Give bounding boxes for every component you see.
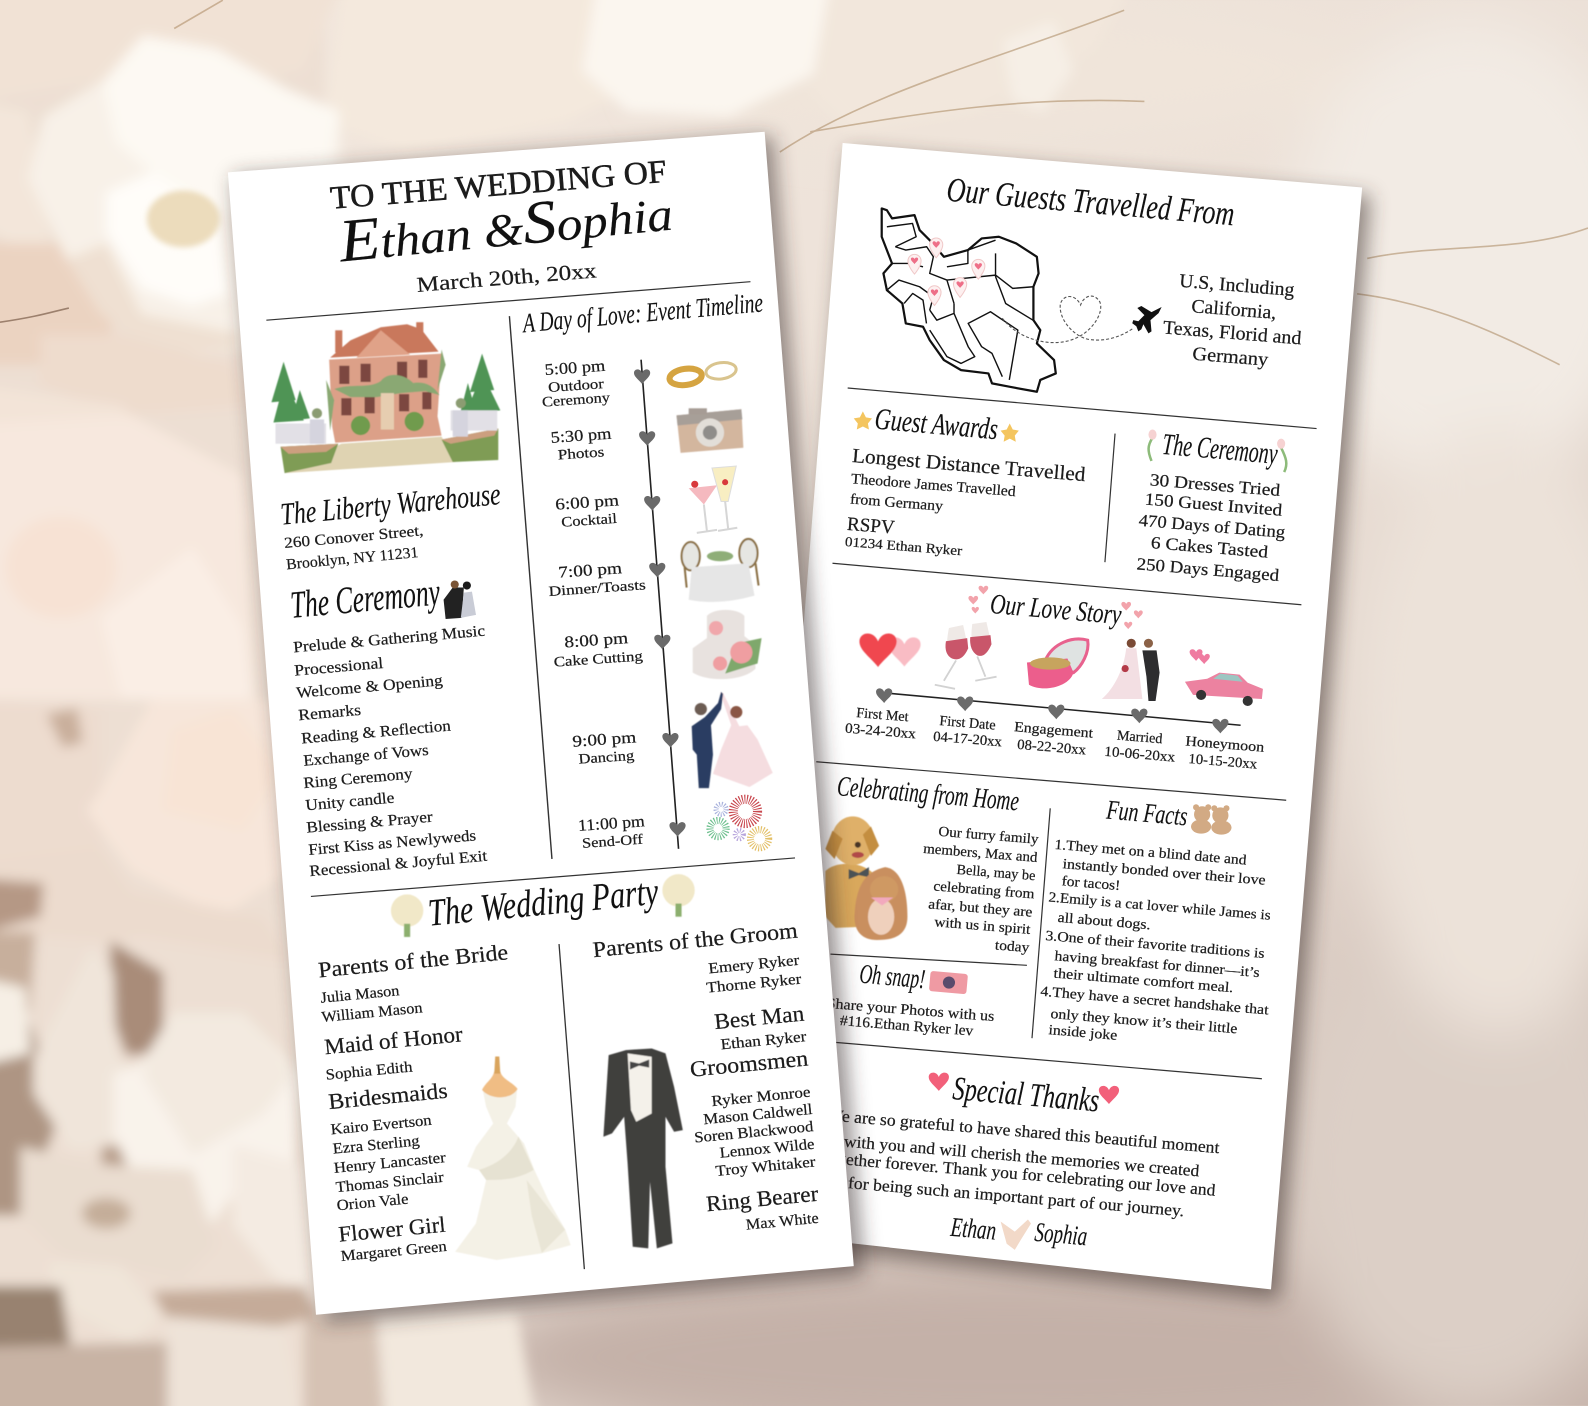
text: fun facts list: for tacos!: [1061, 873, 1121, 894]
groom's side names: Groomsmen: [689, 1045, 809, 1082]
text: ceremony stats: 6 Cakes Tasted: [1150, 533, 1269, 562]
text: thank you message: together forever. Thank you for celebrating our love and: [823, 1148, 1217, 1200]
date: March 20th, 20xx: [416, 258, 598, 297]
text: guest origins: California,: [1191, 296, 1277, 324]
timeline labels: 7:00 pm: [558, 559, 623, 582]
text: furry family note: Our furry family: [938, 824, 1040, 848]
text: fun facts list: their ultimate comfort meal.: [1053, 965, 1234, 996]
groom's side names: Best Man: [713, 1001, 805, 1034]
text: furry family note: celebrating from: [933, 878, 1035, 902]
bride's side names: William Mason: [321, 999, 424, 1026]
love story timeline: Married: [1116, 728, 1163, 747]
love story timeline: Engagement: [1014, 719, 1094, 742]
heading: the ceremony with couple: The Ceremony: [289, 571, 442, 627]
timeline labels: Ceremony: [542, 390, 611, 411]
groom's side names: Soren Blackwood: [694, 1118, 815, 1147]
groom's side names: Emery Ryker: [708, 952, 800, 977]
timeline labels: Outdoor: [548, 376, 605, 396]
love story timeline: 10-06-20xx: [1104, 744, 1176, 766]
ceremony order list: Unity candle: [305, 790, 395, 814]
bride's side names: Orion Vale: [336, 1191, 409, 1214]
venue address: [283, 522, 424, 573]
icon: dancing couple: [692, 692, 773, 788]
signature: ethan and sophia: [949, 1212, 1089, 1251]
ceremony order list: Recessional & Joyful Exit: [309, 848, 489, 880]
bride's side names: Thomas Sinclair: [335, 1169, 444, 1196]
timeline labels: Cake Cutting: [553, 648, 643, 671]
timeline labels: Cocktail: [561, 511, 618, 531]
text: fun facts list: 3.One of their favorite traditions is: [1045, 928, 1265, 962]
couple names: Ethan &Sophia: [335, 177, 675, 275]
text: guest award details: Theodore James Travelled: [850, 471, 1017, 500]
timeline labels: 11:00 pm: [577, 812, 646, 835]
heading: special thanks with balloons: [929, 1070, 1119, 1120]
text: fun facts list: all about dogs.: [1057, 910, 1151, 933]
text: share photos: #116.Ethan Ryker lev: [839, 1013, 974, 1040]
groom's side names: Ryker Monroe: [711, 1084, 811, 1110]
groom's side names: Lennox Wilde: [719, 1136, 815, 1162]
love story timeline: 03-24-20xx: [844, 721, 916, 742]
love story timeline: 08-22-20xx: [1017, 737, 1087, 758]
ceremony order list: Remarks: [298, 702, 362, 724]
bride's side names: Kairo Evertson: [330, 1112, 433, 1138]
text: guest award details: 01234 Ethan Ryker: [844, 534, 963, 558]
timeline labels: 6:00 pm: [555, 491, 620, 514]
icon: bride and groom: [1102, 639, 1160, 701]
text: guest award details: RSPV: [846, 514, 895, 539]
map of guest origins: [882, 208, 1056, 392]
text: fun facts list: only they know it’s their little: [1050, 1006, 1238, 1037]
heading: our love story with hearts: Our Love Story: [989, 589, 1123, 631]
text: furry family note: [923, 824, 1040, 956]
text: thank you message: We are so grateful to have shared this beautiful moment: [826, 1105, 1221, 1157]
ceremony order list: Prelude & Gathering Music: [293, 623, 486, 656]
bride's side names: Flower Girl: [337, 1212, 447, 1247]
text: guest award details: [844, 445, 1086, 558]
ceremony order list: Reading & Reflection: [301, 717, 452, 747]
panel: left card (programme): [228, 132, 864, 1323]
text: share photos: [826, 996, 995, 1040]
timeline labels: Photos: [557, 444, 605, 464]
text: furry family note: today: [994, 937, 1031, 956]
illustration: wedding dress: [455, 1056, 571, 1260]
love story timeline: First Date: [939, 713, 996, 734]
ceremony order list: Welcome & Opening: [296, 672, 444, 702]
text: guest award details: from Germany: [849, 492, 944, 515]
heading: event timeline: A Day of Love: Event Timeline: [520, 287, 764, 338]
groom's side names: Parents of the Groom: [592, 918, 799, 962]
heading: the ceremony with tulips: The Ceremony: [1161, 427, 1279, 471]
text: guest origins: Germany: [1192, 344, 1269, 371]
text: fun facts list: [1040, 837, 1271, 1044]
love story timeline: 04-17-20xx: [933, 729, 1002, 750]
bride's side names: Bridesmaids: [327, 1078, 449, 1114]
icon: wedding cake: [693, 610, 762, 679]
text: thank you message: for being such an important part of our journey.: [847, 1173, 1185, 1220]
text: fun facts list: inside joke: [1048, 1022, 1118, 1044]
illustration: venue house: [271, 322, 500, 473]
icon: wedding rings: [668, 361, 737, 387]
venue name: The Liberty Warehouse: [279, 476, 502, 532]
bride's side names: Margaret Green: [340, 1238, 448, 1265]
text: thank you message: with you and will cherish the memories we created: [843, 1132, 1201, 1180]
text: guest award details: Longest Distance Travelled: [851, 445, 1086, 486]
heading: oh snap with camera: Oh snap!: [858, 959, 926, 994]
icon: camera: [677, 408, 743, 453]
heading: our love story with hearts: [968, 586, 1143, 631]
timeline labels: 5:00 pm: [544, 357, 606, 379]
icon: airplane: [1132, 306, 1162, 333]
signature: ethan and sophia: Ethan: [949, 1212, 997, 1246]
icon: pink car with balloons: [1185, 649, 1263, 706]
heading: the wedding party with bouquets: The Wedding Party: [426, 871, 661, 935]
text: furry family note: Bella, may be: [956, 862, 1036, 884]
ceremony order list: [293, 623, 489, 880]
timeline labels: Dancing: [578, 748, 635, 768]
text: ceremony stats: [1136, 470, 1286, 585]
ceremony order list: Ring Ceremony: [303, 766, 413, 792]
arrow: dashed heart flight path: [1002, 296, 1133, 343]
text: furry family note: afar, but they are: [928, 896, 1033, 921]
text: share photos: Share your Photos with us: [826, 996, 995, 1025]
timeline labels: Send-Off: [582, 832, 644, 852]
text: furry family note: members, Max and: [923, 841, 1038, 866]
timeline labels: [542, 357, 646, 852]
icon: cocktails: [689, 466, 737, 533]
groom's side names: [592, 918, 820, 1234]
ceremony order list: Blessing & Prayer: [306, 809, 434, 837]
groom's side names: Mason Caldwell: [703, 1101, 813, 1128]
groom's side names: Max White: [745, 1210, 820, 1234]
text: ceremony stats: 30 Dresses Tried: [1149, 470, 1281, 500]
timeline labels: 8:00 pm: [564, 629, 629, 651]
groom's side names: Thorne Ryker: [706, 971, 802, 997]
icon: dinner table: [682, 539, 759, 602]
text: ceremony stats: 250 Days Engaged: [1136, 554, 1280, 585]
signature: ethan and sophia: Sophia: [1034, 1217, 1089, 1251]
heading: guest awards with stars: Guest Awards: [873, 402, 999, 446]
text: fun facts list: having breakfast for dinner—it’s: [1054, 948, 1260, 981]
timeline labels: Dinner/Toasts: [548, 577, 646, 600]
heading: fun facts with teddy bears: Fun Facts: [1105, 794, 1189, 831]
ceremony order list: Exchange of Vows: [303, 742, 429, 770]
icon: ring box: [1027, 639, 1088, 688]
text: fun facts list: 4.They have a secret handshake that: [1040, 984, 1269, 1018]
text: ceremony stats: 470 Days of Dating: [1138, 511, 1286, 542]
venue address: Brooklyn, NY 11231: [285, 544, 419, 573]
illustration: tuxedo: [603, 1048, 683, 1248]
icon: fireworks: [710, 799, 769, 848]
title: TO THE WEDDING OF: [329, 154, 668, 217]
icon: dog and cat: [825, 816, 907, 940]
love story timeline: First Met: [856, 705, 909, 725]
timeline line with hearts: [634, 360, 686, 849]
bride's side names: Sophia Edith: [325, 1058, 414, 1084]
bride's side names: Henry Lancaster: [333, 1149, 446, 1177]
bride's side names: Parents of the Bride: [317, 939, 509, 982]
heading: the ceremony with tulips: [1148, 427, 1286, 472]
heading: special thanks with balloons: Special Thanks: [951, 1070, 1101, 1120]
love story timeline: [844, 688, 1265, 773]
heading: our guests travelled from: Our Guests Travelled From: [945, 171, 1236, 233]
love story timeline: Honeymoon: [1185, 733, 1265, 756]
text: guest origins: [1162, 271, 1303, 371]
ceremony order list: First Kiss as Newlyweds: [308, 827, 477, 859]
text: fun facts list: 2.Emily is a cat lover while James is: [1048, 890, 1271, 924]
groom's side names: Ethan Ryker: [720, 1028, 807, 1053]
text: ceremony stats: 150 Guest Invited: [1144, 490, 1283, 520]
text: fun facts list: instantly bonded over their love: [1062, 856, 1266, 889]
bride's side names: Ezra Sterling: [332, 1132, 421, 1158]
icon: wine glasses: [935, 622, 997, 689]
ceremony order list: Processional: [294, 655, 385, 680]
text: fun facts list: 1.They met on a blind date and: [1054, 837, 1247, 869]
panel: right card (guests, awards, story): [755, 143, 1370, 1300]
love story timeline: 10-15-20xx: [1188, 751, 1258, 773]
bride's side names: Julia Mason: [320, 982, 400, 1007]
timeline labels: 5:30 pm: [550, 425, 612, 447]
icon: two hearts: [859, 633, 921, 667]
heading: celebrating from home: Celebrating from Home: [836, 771, 1020, 817]
groom's side names: Ring Bearer: [705, 1181, 820, 1216]
venue address: 260 Conover Street,: [283, 522, 424, 552]
text: guest origins: Texas, Florid and: [1162, 317, 1303, 349]
bride's side names: [317, 939, 509, 1265]
groom's side names: Troy Whitaker: [715, 1153, 816, 1180]
map pins: [908, 238, 985, 305]
bride's side names: Maid of Honor: [323, 1021, 464, 1059]
text: thank you message: [823, 1105, 1221, 1220]
timeline labels: 9:00 pm: [572, 728, 637, 751]
text: guest origins: U.S, Including: [1178, 271, 1296, 301]
text: furry family note: with us in spirit: [934, 914, 1031, 938]
